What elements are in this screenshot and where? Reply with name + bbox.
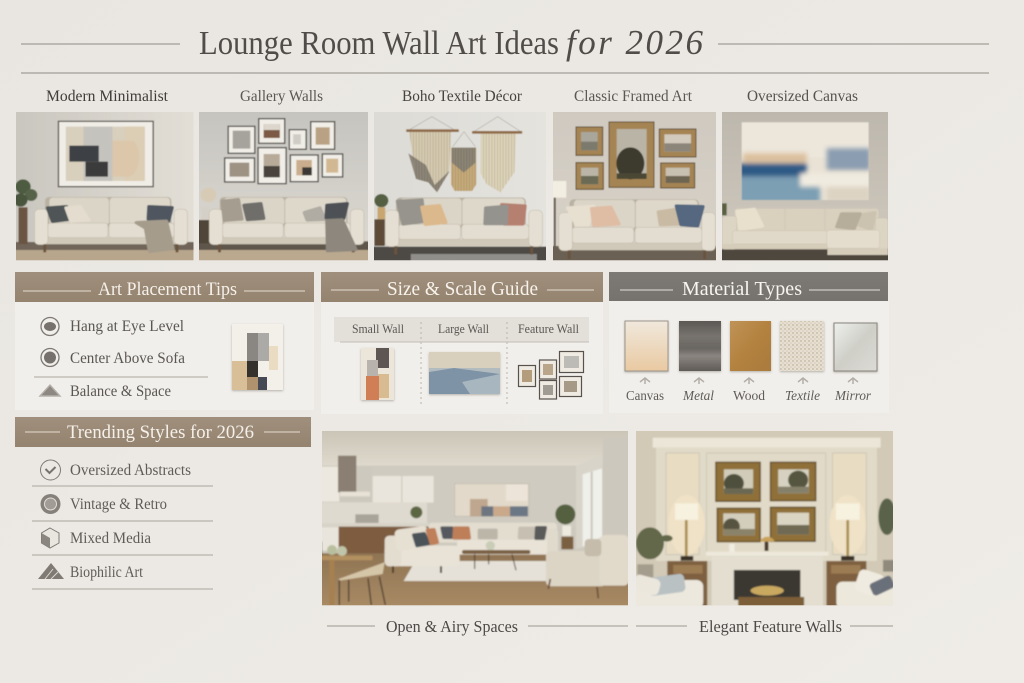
style: biophilic art: Biophilic Art [70,564,144,581]
header: art placement tips: Art Placement Tips [98,279,237,300]
photo: modern minimalist sofa [16,112,194,260]
header: art placement tips [15,272,314,302]
heading: Gallery Walls: Gallery Walls [240,88,323,105]
tip: balance and space: Balance & Space [70,383,171,400]
style: vintage and retro: Vintage & Retro [70,496,167,513]
photo: open and airy living space [322,431,628,606]
style: biophilic art [38,563,144,581]
table header: Large Wall [438,322,489,336]
caption: elegant feature walls: Elegant Feature Walls [699,617,842,636]
panel: trending styles [15,417,311,589]
tip: center above sofa: Center Above Sofa [70,350,185,367]
table header: Small Wall [352,322,404,336]
header: material types: Material Types [682,278,802,300]
title with rules: Lounge Room Wall Art Ideas [199,25,559,62]
photo: oversized canvas sectional [722,112,888,260]
swatch: textile: Textile [785,389,820,404]
photo: classic framed art sofa [553,112,716,260]
art: large wall [429,352,500,394]
photo: gallery wall sofa [199,112,368,260]
header: trending styles: Trending Styles for 2026 [67,422,254,443]
style: oversized abstracts: Oversized Abstracts [70,462,191,479]
swatch: canvas: Canvas [626,389,664,404]
tip: hang at eye level: Hang at Eye Level [70,318,184,335]
swatch: mirror [834,323,877,404]
header: size and scale guide [321,272,603,302]
heading: Boho Textile Décor: Boho Textile Décor [402,88,523,105]
table header: Feature Wall [518,322,580,336]
swatch: wood [730,321,771,404]
art: placement sample [232,324,283,390]
swatch: mirror: Mirror [834,389,872,404]
art: small wall [361,348,394,400]
swatch: wood: Wood [733,389,765,404]
style: oversized abstracts [40,460,191,480]
heading: Modern Minimalist: Modern Minimalist [46,88,169,105]
header: trending styles [15,417,311,447]
swatch: metal: Metal [682,389,714,404]
panel: size and scale guide [321,272,603,414]
style: vintage and retro [40,494,167,514]
photo: boho textile sofa [374,112,546,260]
style: mixed media: Mixed Media [70,530,151,547]
swatch: textile [780,321,824,404]
panel: material types [609,272,889,413]
style: mixed media [42,528,151,548]
title with rules: for 2026 [566,23,704,62]
header: material types [609,272,888,301]
swatch: metal [679,321,721,404]
table header [334,317,589,342]
swatch: canvas [625,321,668,404]
title with rules [21,23,989,73]
panel: art placement tips [15,272,314,410]
caption: open and airy spaces: Open & Airy Spaces [386,617,518,636]
heading: Oversized Canvas: Oversized Canvas [747,88,858,105]
photo: elegant feature wall [636,431,893,606]
heading: Classic Framed Art: Classic Framed Art [574,88,693,105]
art: feature wall gallery [518,352,584,399]
header: size and scale guide: Size & Scale Guide [387,278,538,300]
